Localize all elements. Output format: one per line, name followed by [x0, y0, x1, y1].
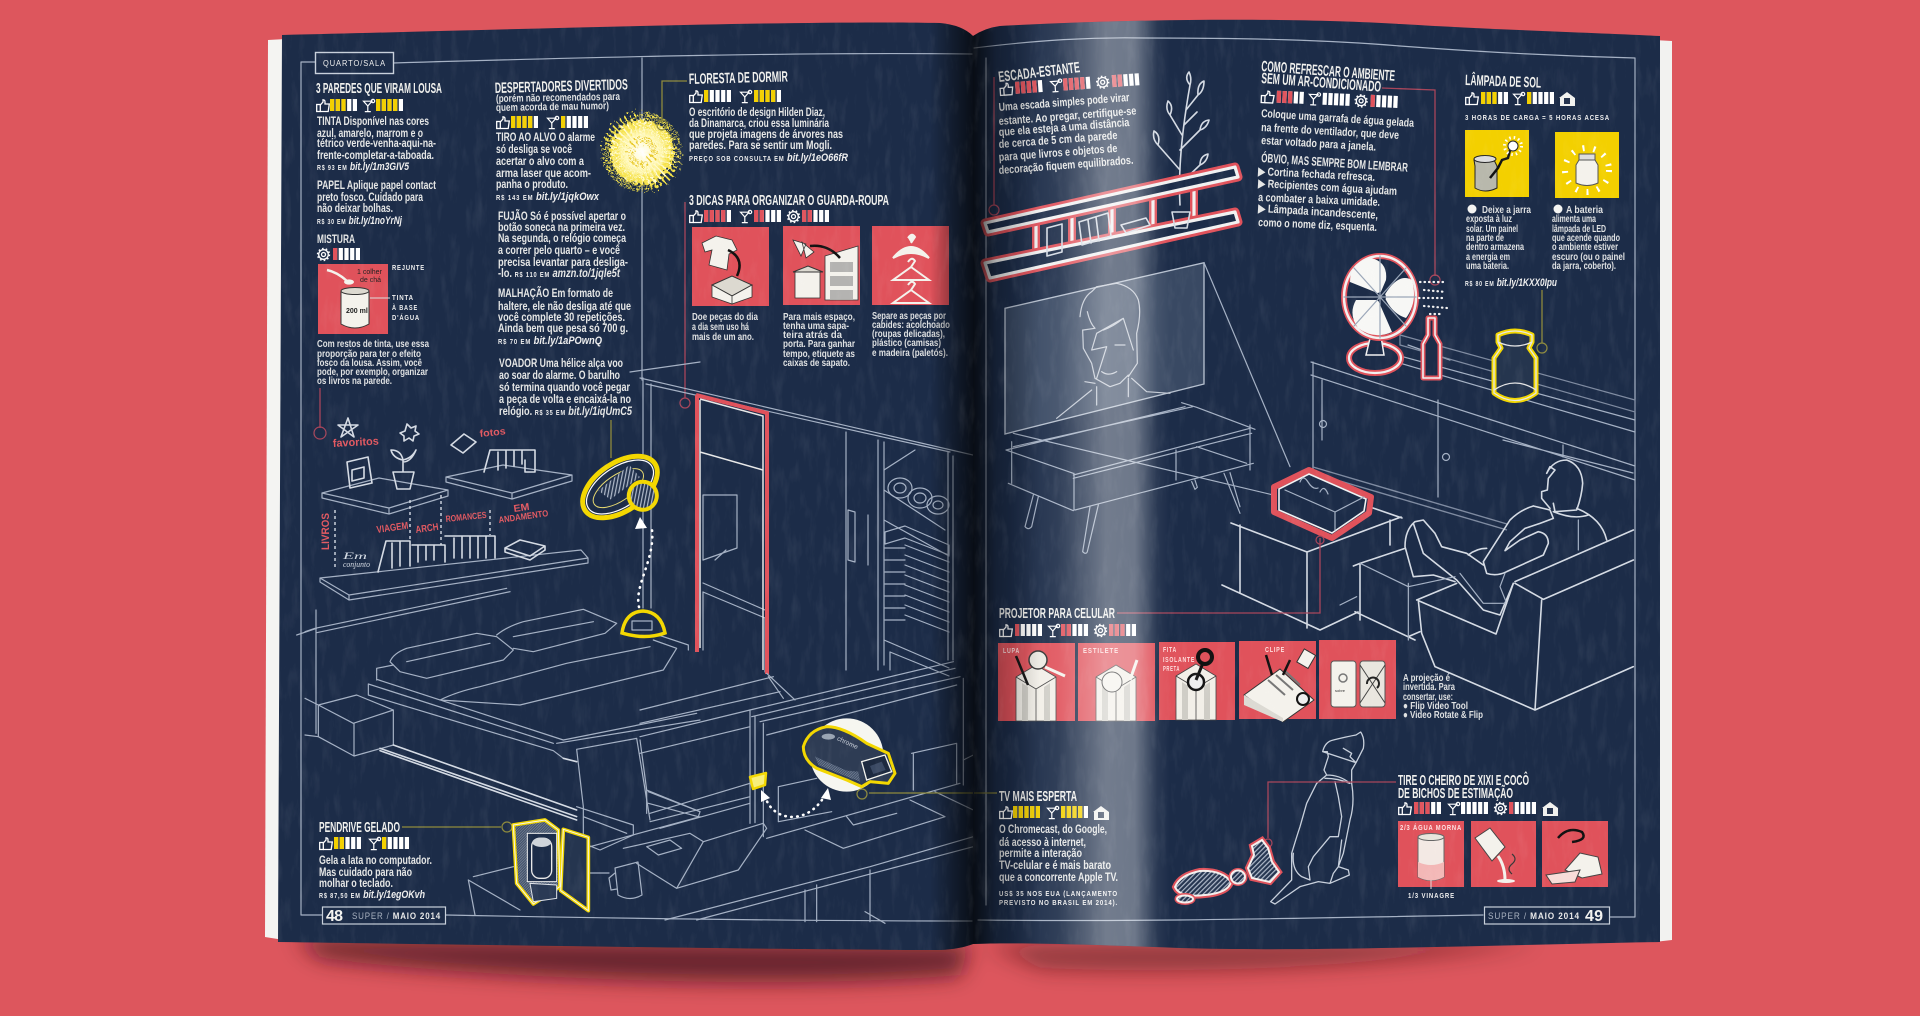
- leader line: chalk walls: [319, 388, 321, 428]
- sideboard: [1311, 335, 1635, 530]
- text: voador: [499, 358, 632, 418]
- icon: solar jar: [1494, 331, 1536, 400]
- sofa: [1417, 530, 1633, 710]
- tile: mixture jar: [318, 264, 388, 334]
- text: tinta: azul, amarelo, marrom e o: [317, 128, 423, 140]
- marker circle: [1430, 275, 1440, 285]
- side note: consertar, use:: [1403, 691, 1453, 703]
- body text: estante. Ao pregar, certifique-se: [998, 105, 1137, 128]
- wall shelves with chalk notes: [320, 418, 588, 600]
- body text: decoração fiquem equilibrados.: [998, 155, 1134, 177]
- mattress: [368, 633, 700, 758]
- rating icons: [1466, 92, 1575, 106]
- bullet list: ▶ Recipientes com água ajudam: [1257, 178, 1397, 198]
- caption: sapateira: [783, 311, 855, 369]
- right page edge: [1654, 40, 1672, 942]
- text: mistura body: Com restos de tinta, use essa: [317, 338, 429, 350]
- body text: que projeta imagens de árvores nas: [689, 129, 843, 141]
- caption: sapateira: caixas de sapato.: [783, 357, 850, 369]
- side note: A projeção é: [1403, 672, 1450, 684]
- text: tiro ao alvo: arma laser que acom-: [496, 168, 591, 180]
- text: malhacao: Ainda bem que pesa só 700 g.: [498, 323, 628, 335]
- side note: ● Flip Video Tool: [1403, 700, 1468, 712]
- text: mistura: MISTURA: [317, 234, 355, 246]
- caption step 2: alimenta uma: [1552, 213, 1596, 225]
- text: papel: PAPEL Aplique papel contact: [317, 180, 436, 192]
- caption step 2: escuro (ou o painel: [1552, 251, 1625, 263]
- tile: fita isolante preta: [1159, 642, 1235, 720]
- label: tinta a base d'agua: [370, 295, 420, 322]
- icon: steering wheel alarm: [572, 444, 674, 539]
- chalk notes: ARCH: [415, 522, 439, 536]
- tile: mixture glass: 2/3 ÁGUA MORNA: [1400, 823, 1462, 832]
- price note: PREVISTO NO BRASIL EM 2014).: [999, 900, 1118, 907]
- heading: TIRE O CHEIRO DE XIXI E COCÔ: [1398, 771, 1529, 789]
- flower doodle: [400, 424, 419, 441]
- leader line: voador: [610, 420, 612, 458]
- tile: wiping: [1542, 821, 1608, 887]
- tile: mixture jar: 1 colher: [357, 269, 383, 276]
- icon: tree lamp: [610, 120, 674, 184]
- body text: Mas cuidado para não: [319, 867, 412, 879]
- price note: US$ 35 NOS EUA (LANÇAMENTO: [999, 891, 1118, 898]
- panel: left page 48: [278, 20, 974, 952]
- icon: fan: [1344, 256, 1416, 373]
- body text: que a concorrente Apple TV.: [999, 872, 1118, 884]
- bed rails: [380, 745, 577, 820]
- tile: glowing jar: [1555, 132, 1619, 198]
- magazine shadow: [295, 938, 1540, 982]
- icon: bottle: [1423, 318, 1440, 378]
- page footer 49: 49: [1585, 908, 1603, 925]
- illustration: dog: [1271, 732, 1364, 904]
- heading: TV MAIS ESPERTA: [999, 788, 1077, 805]
- caption: cabides: e madeira (paletós).: [872, 347, 948, 359]
- tile: estilete: ESTILETE: [1083, 648, 1119, 655]
- chalk notes: ROMANCES: [445, 510, 487, 524]
- panel: right page 49: [973, 18, 1663, 954]
- icon: cool mist droplets: [1419, 282, 1447, 314]
- caption: cabides: cabides: acolchoado: [872, 319, 950, 331]
- chalk dashed lines: [335, 495, 490, 570]
- caption step 2: lâmpada de LED: [1552, 223, 1606, 235]
- page frame: [974, 38, 1635, 921]
- block: 3 dicas para organizar o guarda-roupa: [689, 192, 950, 369]
- body text: TV-celular e é mais barato: [999, 860, 1111, 872]
- block: lampada de sol: [1465, 71, 1625, 289]
- heading: DESPERTADORES DIVERTIDOS: [495, 76, 628, 97]
- body text: [998, 92, 1137, 177]
- bed: [297, 588, 700, 915]
- books on shelf: [451, 434, 535, 472]
- text: tiro ao alvo: acertar o alvo com a: [496, 156, 584, 168]
- tile: lupa: [998, 643, 1075, 721]
- text: fujao: botão soneca na primeira vez.: [498, 222, 625, 234]
- block: person on sofa: [1340, 460, 1633, 710]
- caption: sapateira: Para mais espaço,: [783, 311, 855, 323]
- leader line: como refrescar: [1382, 88, 1435, 276]
- marker circle: [1264, 839, 1272, 847]
- caption step 2: A bateria: [1566, 204, 1603, 216]
- nightstand: [305, 695, 393, 756]
- caption step 1: exposta à luz: [1466, 213, 1512, 225]
- bullet list: como o nome diz, esquenta.: [1258, 217, 1377, 234]
- dotted arrow: alarm flies: [635, 517, 652, 607]
- tile: clipe: CLIPE: [1265, 647, 1285, 654]
- body text: da Dinamarca, criou essa luminária: [689, 118, 829, 130]
- tile: clipe: [1239, 641, 1316, 722]
- books lower shelf: [378, 536, 545, 572]
- leader line: escada: [993, 77, 995, 205]
- text: tiro ao alvo: TIRO AO ALVO O alarme: [496, 132, 595, 144]
- text: fujao: [498, 210, 628, 280]
- caption step 2: da jarra, coberto).: [1552, 260, 1616, 272]
- chalk notes: conjunto: [343, 560, 370, 569]
- page footer 48: 48: [326, 908, 343, 925]
- left page edge: [265, 39, 286, 940]
- block: floresta de dormir: [689, 68, 848, 164]
- text: voador: VOADOR Uma hélice alça voo: [499, 358, 623, 370]
- chair: [577, 738, 700, 850]
- label: vinagre: [1408, 880, 1455, 900]
- body text: dá acesso à internet,: [999, 837, 1086, 849]
- spine shade right: [973, 25, 1035, 944]
- text: voador: só termina quando você pegar: [499, 382, 630, 394]
- text: tinta: frente-completar-a-taboada.: [317, 150, 434, 162]
- rating icons: [317, 99, 403, 112]
- tile: shoe rack: [783, 226, 860, 305]
- heading: COMO REFRESCAR O AMBIENTE: [1261, 58, 1396, 85]
- text: voador: relógio. R$ 35 EM bit.ly/1iqUmC5: [499, 406, 632, 418]
- leader line: lampada de sol: [1541, 290, 1543, 343]
- leader line: projetor: [1117, 538, 1320, 613]
- tile: mixture jar: de chá: [360, 277, 381, 284]
- rating icons: [690, 90, 781, 103]
- caption: doe pecas: mais de um ano.: [692, 331, 754, 343]
- illustration: projected tv screen: [1005, 263, 1290, 467]
- projector box illustration: [1222, 470, 1402, 630]
- block: 3 paredes que viram lousa: [316, 80, 442, 387]
- wardrobe: [630, 362, 973, 676]
- text: mistura body: proporção para ter o efeito: [317, 348, 421, 360]
- heading: [1261, 58, 1396, 96]
- marker circle: [1537, 343, 1547, 353]
- page footer 49: [1484, 907, 1610, 925]
- block: projetor para celular: [998, 605, 1483, 722]
- text: mistura body: pode, por exemplo, organizar: [317, 366, 428, 378]
- mug: [590, 862, 642, 898]
- caption step 1: solar. Um painel: [1466, 223, 1518, 235]
- tile: hangers: [872, 226, 949, 305]
- rating icons: [1000, 624, 1136, 637]
- icon: alarm base dome: [622, 611, 665, 636]
- body text: [319, 855, 432, 901]
- label: tinta a base d'agua: D'ÁGUA: [392, 313, 420, 322]
- chalk notes: VIAGEM: [376, 521, 409, 536]
- heading: 3 PAREDES QUE VIRAM LOUSA: [316, 80, 442, 97]
- arrow tip: tv line: [974, 792, 997, 794]
- heading: ESCADA-ESTANTE: [997, 59, 1081, 86]
- rating icons: [690, 210, 829, 223]
- red hexagon box: [1274, 470, 1371, 538]
- spine shade left: [930, 20, 974, 952]
- rating icons: [318, 248, 360, 260]
- tile: fita isolante preta: PRETA: [1163, 666, 1180, 673]
- text: tiro ao alvo: R$ 143 EM bit.ly/1jqkOwx: [496, 191, 600, 203]
- side note: [1403, 672, 1483, 721]
- rating icons: [1000, 806, 1109, 820]
- desk: [468, 817, 700, 915]
- marker circle: [857, 789, 867, 799]
- tile: pouring: [1471, 821, 1536, 887]
- projection ray: [1204, 263, 1290, 467]
- bowie face: [1057, 283, 1170, 418]
- marker circle: [989, 205, 999, 215]
- text: malhacao: você complete 30 repetições.: [498, 312, 625, 324]
- chalk texture left: [278, 20, 974, 952]
- dotted arrow: chromecast plug: [761, 788, 831, 817]
- chalk notes: [320, 426, 549, 569]
- text: papel: preto fosco. Cuidado para: [317, 192, 423, 204]
- section tag: QUARTO/SALA: [323, 59, 386, 68]
- body text: R$ 87,50 EM bit.ly/1egOKvh: [319, 889, 425, 901]
- block: tire o cheiro: [1398, 771, 1608, 900]
- body text: PREÇO SOB CONSULTA EM bit.ly/1eO66fR: [689, 152, 848, 164]
- tile: mixture glass: [1398, 821, 1464, 887]
- body text: Uma escada simples pode virar: [998, 92, 1130, 114]
- section tag: [316, 52, 394, 74]
- chalk notes: ANDAMENTO: [498, 508, 549, 525]
- icon: tv port: [750, 773, 766, 789]
- text: tinta: R$ 93 EM bit.ly/1m3GIV5: [317, 161, 410, 173]
- pillows: [390, 609, 617, 678]
- tile: donate clothes: [692, 227, 769, 306]
- text: papel: [317, 180, 436, 227]
- text: malhacao: R$ 70 EM bit.ly/1aPOwnQ: [498, 335, 602, 347]
- label: vinagre: 1/3 VINAGRE: [1408, 893, 1455, 900]
- body text: permite a interação: [999, 848, 1082, 860]
- text: mistura body: fosco da lousa. Assim, você: [317, 357, 422, 369]
- price: R$ 80 EM bit.ly/1KXX0Ipu: [1465, 277, 1557, 289]
- body text: estar voltado para a janela.: [1261, 135, 1376, 154]
- subheading: ÓBVIO, MAS SEMPRE BOM LEMBRAR: [1261, 150, 1408, 175]
- tile: jar in sun: [1465, 130, 1529, 197]
- page footer 49: SUPER / MAIO 2014: [1488, 911, 1580, 922]
- tile: phones: sobre: [1335, 688, 1346, 693]
- chalk notes: LIVROS: [320, 513, 332, 550]
- rating icons: [1399, 802, 1558, 816]
- text: tiro ao alvo: só desliga se você: [496, 144, 572, 156]
- label: tinta a base d'agua: TINTA: [392, 295, 414, 302]
- heading: SEM UM AR-CONDICIONADO: [1261, 70, 1382, 96]
- label: rejunte: REJUNTE: [392, 265, 425, 272]
- body text: [1261, 108, 1415, 154]
- text: tinta: TINTA Disponível nas cores: [317, 116, 429, 128]
- rating icons: [497, 116, 588, 129]
- tile: fita isolante preta: FITA: [1163, 647, 1177, 654]
- leader line: floresta: [662, 81, 687, 122]
- leader line: 3 dicas: [684, 202, 686, 398]
- spec line: 3 HORAS DE CARGA = 5 HORAS ACESA: [1465, 115, 1610, 122]
- person: [1405, 460, 1607, 615]
- text: fujao: -lo. R$ 110 EM amzn.to/1jqle5t: [498, 268, 621, 280]
- laptop: [623, 823, 767, 888]
- desk and partition: [623, 662, 973, 923]
- page footer 48: SUPER / MAIO 2014: [352, 911, 441, 922]
- tile: fita isolante preta: ISOLANTE: [1163, 657, 1195, 664]
- side note: ● Video Rotate & Flip: [1403, 709, 1483, 721]
- icon: chromecast: chrome: [836, 735, 859, 751]
- block: pendrive gelado: [319, 819, 512, 901]
- rating icons: [1000, 73, 1140, 96]
- body text: [689, 107, 848, 164]
- icon: chromecast: [803, 718, 895, 792]
- footstool: [1353, 548, 1420, 640]
- heading: PROJETOR PARA CELULAR: [999, 605, 1115, 622]
- text: malhacao: haltere, ele não desliga até que: [498, 301, 631, 313]
- caption: sapateira: porta. Para ganhar: [783, 338, 855, 350]
- side note: invertida. Para: [1403, 681, 1455, 693]
- book and plant: [347, 450, 416, 489]
- caption: cabides: plástico (camisas): [872, 337, 941, 349]
- text: mistura body: os livros na parede.: [317, 375, 392, 387]
- caption step 2: o ambiente estiver: [1552, 241, 1618, 253]
- text: papel: não deixar bolhas.: [317, 203, 393, 215]
- body text: Gela a lata no computador.: [319, 855, 432, 867]
- chalk notes: fotos: [479, 426, 507, 440]
- subheading: [496, 91, 620, 114]
- caption: sapateira: tempo, etiquete as: [783, 348, 855, 360]
- heading: LÂMPADA DE SOL: [1465, 71, 1541, 92]
- heading: [1398, 771, 1529, 802]
- body text: que ela esteja a uma distância: [998, 117, 1130, 139]
- marker circle: [314, 427, 326, 439]
- text: papel: R$ 30 EM bit.ly/1noYrNj: [317, 215, 403, 227]
- text: fujao: precisa levantar para desliga-: [498, 257, 628, 269]
- text: tiro ao alvo: [496, 132, 600, 203]
- bullet list: [1257, 166, 1397, 234]
- bullet list: ▶ Cortina fechada refresca.: [1257, 166, 1375, 184]
- page frame: [301, 54, 972, 921]
- subheading: (porém não recomendados para: [496, 91, 620, 105]
- tile: lupa: LUPA: [1003, 648, 1020, 655]
- caption: sapateira: teira atrás da: [783, 329, 842, 341]
- marker circle: [657, 120, 667, 130]
- heading: DE BICHOS DE ESTIMAÇÃO: [1398, 784, 1513, 802]
- bullet list: ▶ Lâmpada incandescente,: [1257, 203, 1378, 222]
- bullet list: a combater a baixa umidade.: [1258, 192, 1380, 209]
- caption: doe pecas: a dia sem uso há: [692, 321, 749, 333]
- text: mistura body: [317, 338, 429, 387]
- body text: [999, 824, 1118, 884]
- tv stand: [1006, 403, 1273, 553]
- caption step 2: que acende quando: [1552, 232, 1620, 244]
- body text: Coloque uma garrafa de água gelada: [1261, 108, 1415, 130]
- body text: na frente do ventilador, que deve: [1261, 122, 1399, 142]
- caption: cabides: [872, 310, 950, 359]
- caption step 1: [1466, 204, 1531, 272]
- caption: doe pecas: [692, 311, 758, 343]
- text: tinta: tétrico verde-venha-aqui-na-: [317, 138, 436, 150]
- caption step 1: na parte de: [1466, 232, 1504, 244]
- price note: [999, 891, 1118, 907]
- caption step 1: Deixe a jarra: [1482, 204, 1531, 216]
- block: escada-estante: [997, 59, 1140, 177]
- heading: PENDRIVE GELADO: [319, 819, 400, 836]
- chalk texture right: [973, 18, 1663, 954]
- tile: mixture jar: 200 ml: [346, 308, 368, 315]
- text: tinta: [317, 116, 436, 173]
- text: fujao: a correr pelo quarto – e você: [498, 245, 620, 257]
- leader line: xixi: [1268, 782, 1396, 838]
- tile: estilete: [1078, 643, 1155, 721]
- icon: mini fridge: [513, 820, 588, 911]
- caption step 1: uma bateria.: [1466, 260, 1509, 272]
- text: fujao: FUJÃO Só é possível apertar o: [498, 210, 626, 223]
- leader line: tv mais esperta: [869, 792, 973, 794]
- text: tiro ao alvo: panha o produto.: [496, 179, 568, 191]
- body text: O Chromecast, do Google,: [999, 824, 1107, 836]
- text: voador: a peça de volta e encaixá-la no: [499, 394, 631, 406]
- text: fujao: Na segunda, o relógio começa: [498, 233, 626, 245]
- chalk notes: favoritos: [333, 436, 379, 450]
- page gloss band: [1030, 20, 1162, 947]
- page footer 48: [322, 907, 446, 925]
- marker circle: [1316, 536, 1324, 544]
- leader line: [402, 826, 501, 828]
- rating icons: [1261, 90, 1398, 109]
- icon: ladder shelf: [985, 167, 1238, 278]
- block: como refrescar o ambiente: [1257, 58, 1415, 234]
- wardrobe red door: [696, 395, 767, 674]
- towels on shelves: [884, 450, 949, 676]
- block: despertadores divertidos: [495, 76, 632, 418]
- icon: plant on ladder: [1154, 72, 1209, 205]
- caption step 1: dentro armazena: [1466, 241, 1524, 253]
- caption step 2: [1552, 204, 1625, 272]
- subheading: quem acorda de mau humor): [496, 100, 609, 114]
- text: malhacao: MALHAÇÃO Em formato de: [498, 287, 613, 300]
- chalk notes: Em: [341, 551, 368, 561]
- body text: de cerca de 5 cm da parede: [998, 130, 1118, 151]
- block: tv mais esperta: [999, 788, 1118, 907]
- star doodle: [338, 418, 358, 437]
- caption: cabides: (roupas delicadas),: [872, 328, 945, 340]
- body text: molhar o teclado.: [319, 878, 393, 890]
- body text: O escritório de design Hilden Diaz,: [689, 107, 825, 119]
- marker circle: [680, 398, 690, 408]
- heading: FLORESTA DE DORMIR: [689, 68, 788, 88]
- text: malhacao: [498, 287, 631, 347]
- label: tinta a base d'agua: À BASE: [392, 303, 418, 312]
- caption step 1: a energia em: [1466, 251, 1510, 263]
- heading: 3 DICAS PARA ORGANIZAR O GUARDA-ROUPA: [689, 192, 889, 209]
- rating icons: [320, 837, 409, 850]
- tile: phones: [1319, 640, 1396, 719]
- body text: para que livros e objetos de: [998, 143, 1118, 164]
- caption: sapateira: tenha uma sapa-: [783, 320, 849, 332]
- body text: paredes. Para se sentir um Mogli.: [689, 140, 832, 152]
- marker circle: [502, 822, 512, 832]
- caption: cabides: Separe as peças por: [872, 310, 946, 322]
- chalk notes: EM: [513, 502, 530, 515]
- caption: doe pecas: Doe peças do dia: [692, 311, 758, 323]
- icon: stains: [1175, 840, 1279, 902]
- text: voador: ao soar do alarme. O barulho: [499, 370, 620, 382]
